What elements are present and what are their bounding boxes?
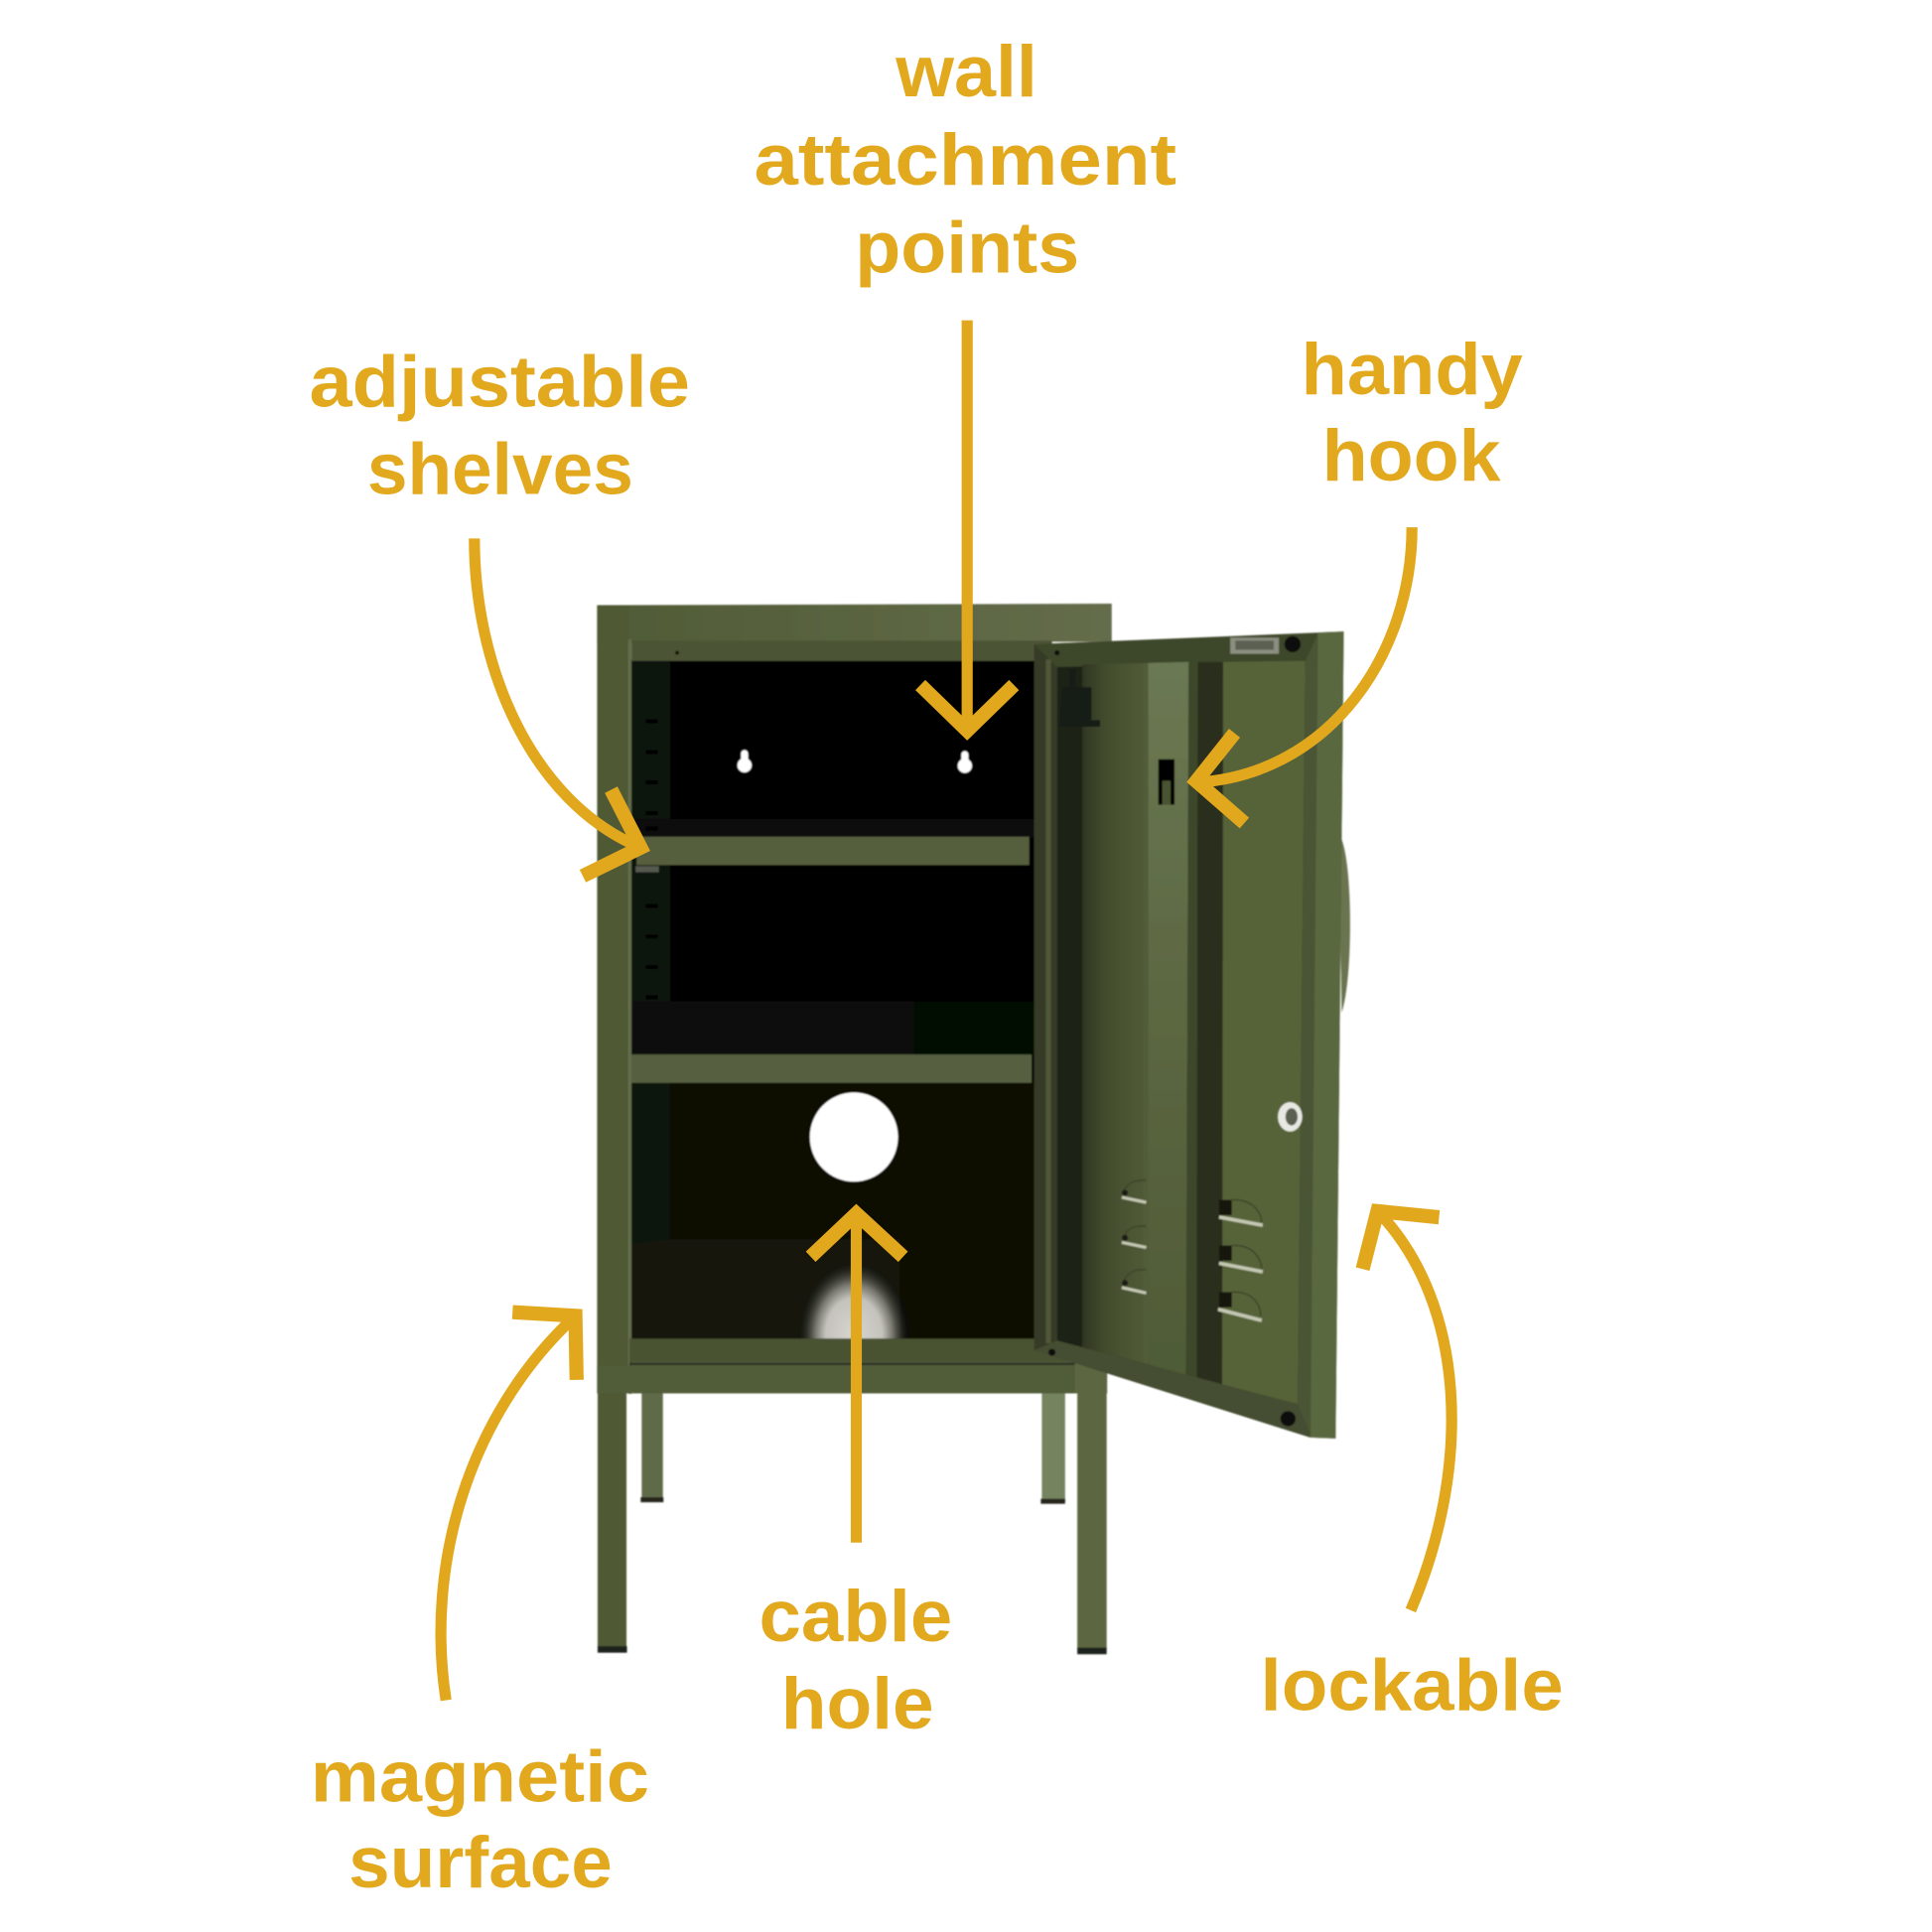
left vents [1122,1197,1146,1293]
label: cable hole: hole [781,1663,934,1744]
infographic: locker with labelled features [312,44,1561,1888]
door handle bulge [1338,834,1350,1013]
door inner panels [1082,663,1149,1364]
right vents [1218,1217,1263,1320]
label: wall attachment points: wall [895,31,1037,112]
left-wall shelf slots [635,719,659,1000]
back legs [640,1391,1065,1504]
wall attachment keyholes [738,751,972,772]
label: handy hook: hook [1322,415,1501,496]
hinge [1059,687,1100,727]
handy hook slot [1159,759,1174,805]
label: lockable: lockable [1261,1645,1564,1726]
label: handy hook: handy [1301,329,1523,410]
label: magnetic surface: magnetic [311,1735,649,1817]
arrow: cable hole [811,1213,903,1543]
cabinet interior [630,659,1040,1340]
label: wall attachment points [754,31,1176,288]
label: adjustable shelves: shelves [367,429,633,510]
label: wall attachment points: points [855,207,1079,288]
cabinet frame [597,604,1112,1394]
arrow: handy hook [1196,527,1412,823]
label: cable hole [759,1576,952,1744]
label: handy hook [1301,329,1523,496]
arrow: lockable [1363,1211,1451,1610]
lock [1278,1102,1303,1132]
arrow: adjustable shelves [475,538,640,876]
bottom bolts [1281,1411,1296,1427]
label: magnetic surface [311,1735,649,1903]
label: magnetic surface: surface [348,1822,613,1903]
locker cabinet [597,604,1350,1654]
top plate and bolt [1230,637,1279,654]
label: cable hole: cable [759,1576,952,1657]
shelves [630,837,1032,1083]
arrow: magnetic surface [441,1312,577,1701]
cable hole [810,1092,897,1181]
open door [1035,631,1343,1439]
reflection on cabinet floor [801,1265,909,1340]
label: wall attachment points: attachment [754,119,1176,201]
front legs [598,1391,1107,1654]
label: adjustable shelves: adjustable [309,342,690,423]
label: adjustable shelves [309,342,690,510]
arrow: wall attachment [920,321,1014,731]
